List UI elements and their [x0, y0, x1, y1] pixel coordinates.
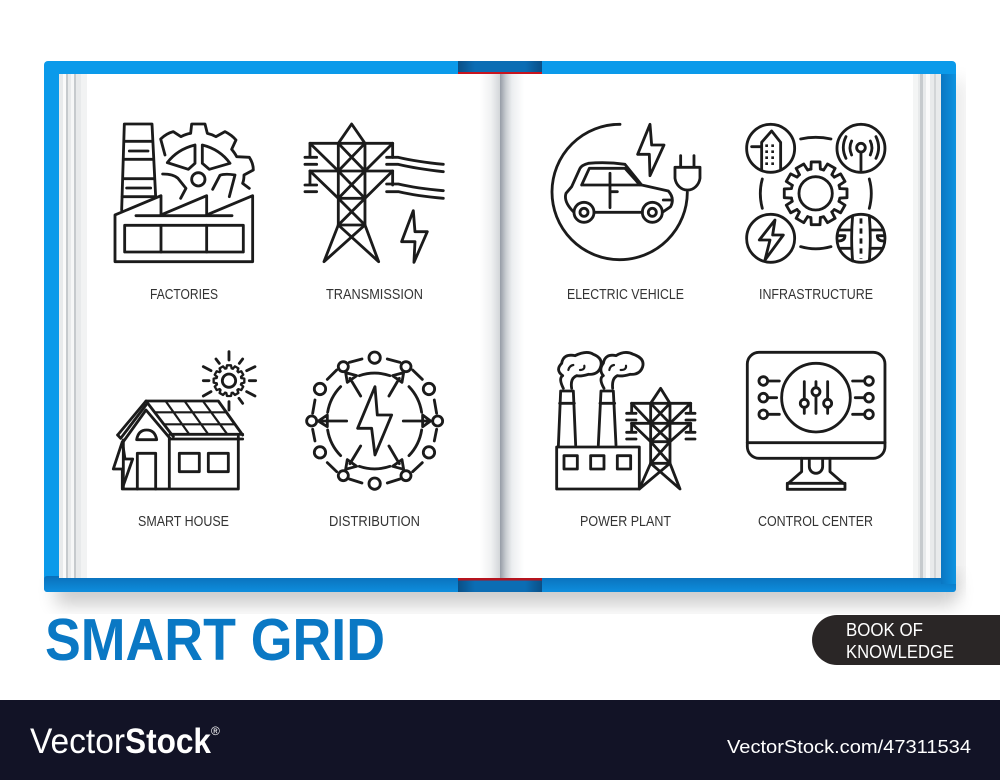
icon: control center monitor — [747, 352, 885, 489]
badge: book of knowledge — [812, 615, 1000, 665]
icon: transmission tower — [305, 124, 443, 262]
label: infrastructure: INFRASTRUCTURE — [759, 287, 873, 303]
icon: power plant — [557, 352, 695, 489]
label: factories: FACTORIES — [150, 287, 218, 303]
road circle — [837, 214, 885, 262]
label: transmission: TRANSMISSION — [326, 287, 423, 303]
label: electric vehicle: ELECTRIC VEHICLE — [567, 287, 684, 303]
book cover — [44, 61, 956, 592]
spine band top — [458, 61, 542, 74]
power circle — [747, 214, 795, 262]
icon: electric vehicle — [552, 124, 700, 260]
building circle — [747, 124, 795, 172]
spine band bottom — [458, 578, 542, 592]
logo: Vector — [30, 722, 125, 761]
right page — [500, 74, 941, 578]
label: power plant: POWER PLANT — [580, 514, 671, 530]
icon: infrastructure — [747, 124, 885, 262]
book — [44, 61, 964, 605]
antenna circle — [837, 124, 885, 172]
badge: book of knowledge: BOOK OF — [846, 620, 923, 640]
icon: distribution — [307, 352, 443, 489]
title: SMART GRID — [45, 607, 385, 673]
logo: Stock — [125, 722, 211, 761]
central gear — [784, 162, 847, 225]
label: distribution: DISTRIBUTION — [329, 514, 420, 530]
logo: ® — [211, 724, 220, 738]
label: smart house: SMART HOUSE — [138, 514, 229, 530]
footer bar — [0, 700, 1000, 780]
left page — [59, 74, 500, 578]
icon: smart house — [113, 352, 256, 489]
icon: factories — [115, 124, 253, 262]
logo — [30, 722, 220, 761]
image id: VectorStock.com/47311534 — [727, 737, 971, 757]
sun — [203, 352, 256, 410]
badge: book of knowledge: KNOWLEDGE — [846, 642, 954, 662]
label: control center: CONTROL CENTER — [758, 514, 873, 530]
